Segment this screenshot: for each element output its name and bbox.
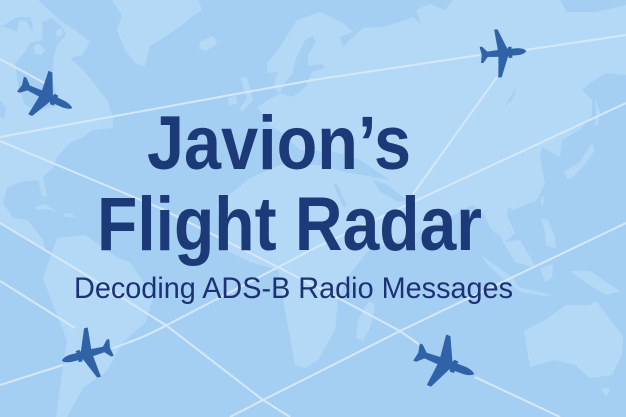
- land: Greenland: [112, 0, 202, 66]
- land: Great Britain and Ireland: [228, 77, 253, 112]
- seas of northern Canada: [0, 17, 66, 118]
- path: left diagonal: [0, 223, 290, 417]
- path: to lower-left plane: [0, 281, 75, 328]
- title: first line: Javion’s: [147, 101, 411, 186]
- land: Southeast Asia islands: [481, 196, 620, 296]
- subtitle: Decoding ADS-B Radio Messages: [74, 272, 513, 305]
- icon: plane top right: [478, 27, 528, 79]
- icon: plane bottom left: [55, 323, 118, 385]
- path: curved route from lower-left plane to the right edge: [0, 103, 626, 385]
- land: Sakhalin: [595, 100, 600, 126]
- land: South America: [43, 235, 153, 417]
- land: Australia: [524, 301, 623, 378]
- path: across the title to lower-right plane: [0, 141, 560, 417]
- icon: plane top left: [10, 62, 82, 130]
- icon: plane bottom right: [407, 327, 484, 399]
- land: Indochina and Malay peninsula: [490, 228, 536, 268]
- land: Eurasia and Africa: [217, 0, 626, 368]
- path: from top-right plane down to the title: [413, 77, 497, 194]
- path: bottom diagonal: [230, 223, 626, 417]
- islands of northern Canada: [20, 28, 63, 128]
- path: long route through top-right plane: [0, 35, 626, 137]
- land: Japan: [563, 143, 595, 180]
- land: Tasmania: [601, 388, 610, 397]
- land: Caribbean islands: [35, 204, 75, 217]
- land: Iceland: [199, 36, 217, 51]
- inland seas of Eurasia: [280, 36, 515, 207]
- path: to top-left plane: [0, 59, 50, 86]
- land: Madagascar: [356, 301, 375, 341]
- land: North America: [0, 0, 113, 250]
- title: second line: Flight Radar: [97, 182, 482, 267]
